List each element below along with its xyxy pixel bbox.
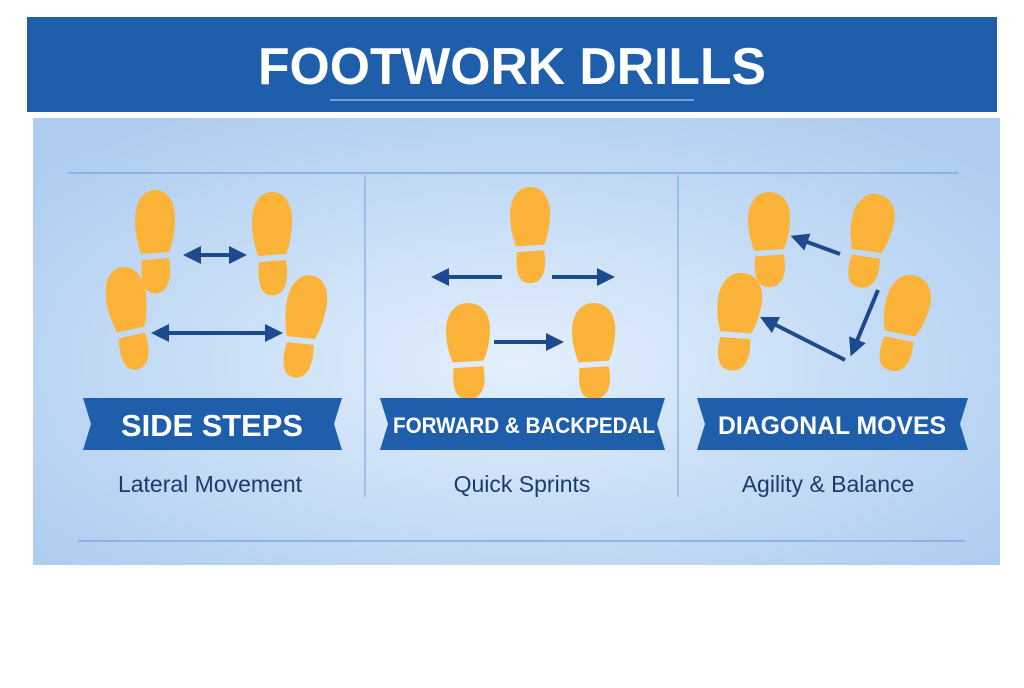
footprints: forward (446, 187, 615, 399)
ribbon: diagonal moves (697, 398, 968, 450)
subtitle: lateral movement: Lateral Movement (118, 471, 303, 497)
ribbon: forward & backpedal (380, 398, 665, 450)
background panel (33, 118, 1000, 565)
footprints: side steps (102, 190, 331, 381)
ribbon: forward & backpedal: FORWARD & BACKPEDAL (393, 413, 655, 438)
subtitle: quick sprints: Quick Sprints (454, 471, 590, 497)
subtitle: agility & balance: Agility & Balance (742, 471, 914, 497)
header banner (27, 17, 997, 112)
footprints: diagonal (708, 190, 937, 376)
title: FOOTWORK DRILLS (258, 38, 766, 96)
panel: diagonal moves (697, 190, 968, 497)
ribbon: diagonal moves: DIAGONAL MOVES (718, 412, 946, 440)
arrows: forward (440, 277, 606, 342)
panel: forward & backpedal (380, 187, 665, 497)
ribbon: side steps: SIDE STEPS (121, 408, 303, 443)
arrows: side steps (160, 255, 274, 333)
arrows: diagonal (768, 239, 878, 360)
panel: side steps (83, 190, 342, 497)
ribbon: side steps (83, 398, 342, 450)
